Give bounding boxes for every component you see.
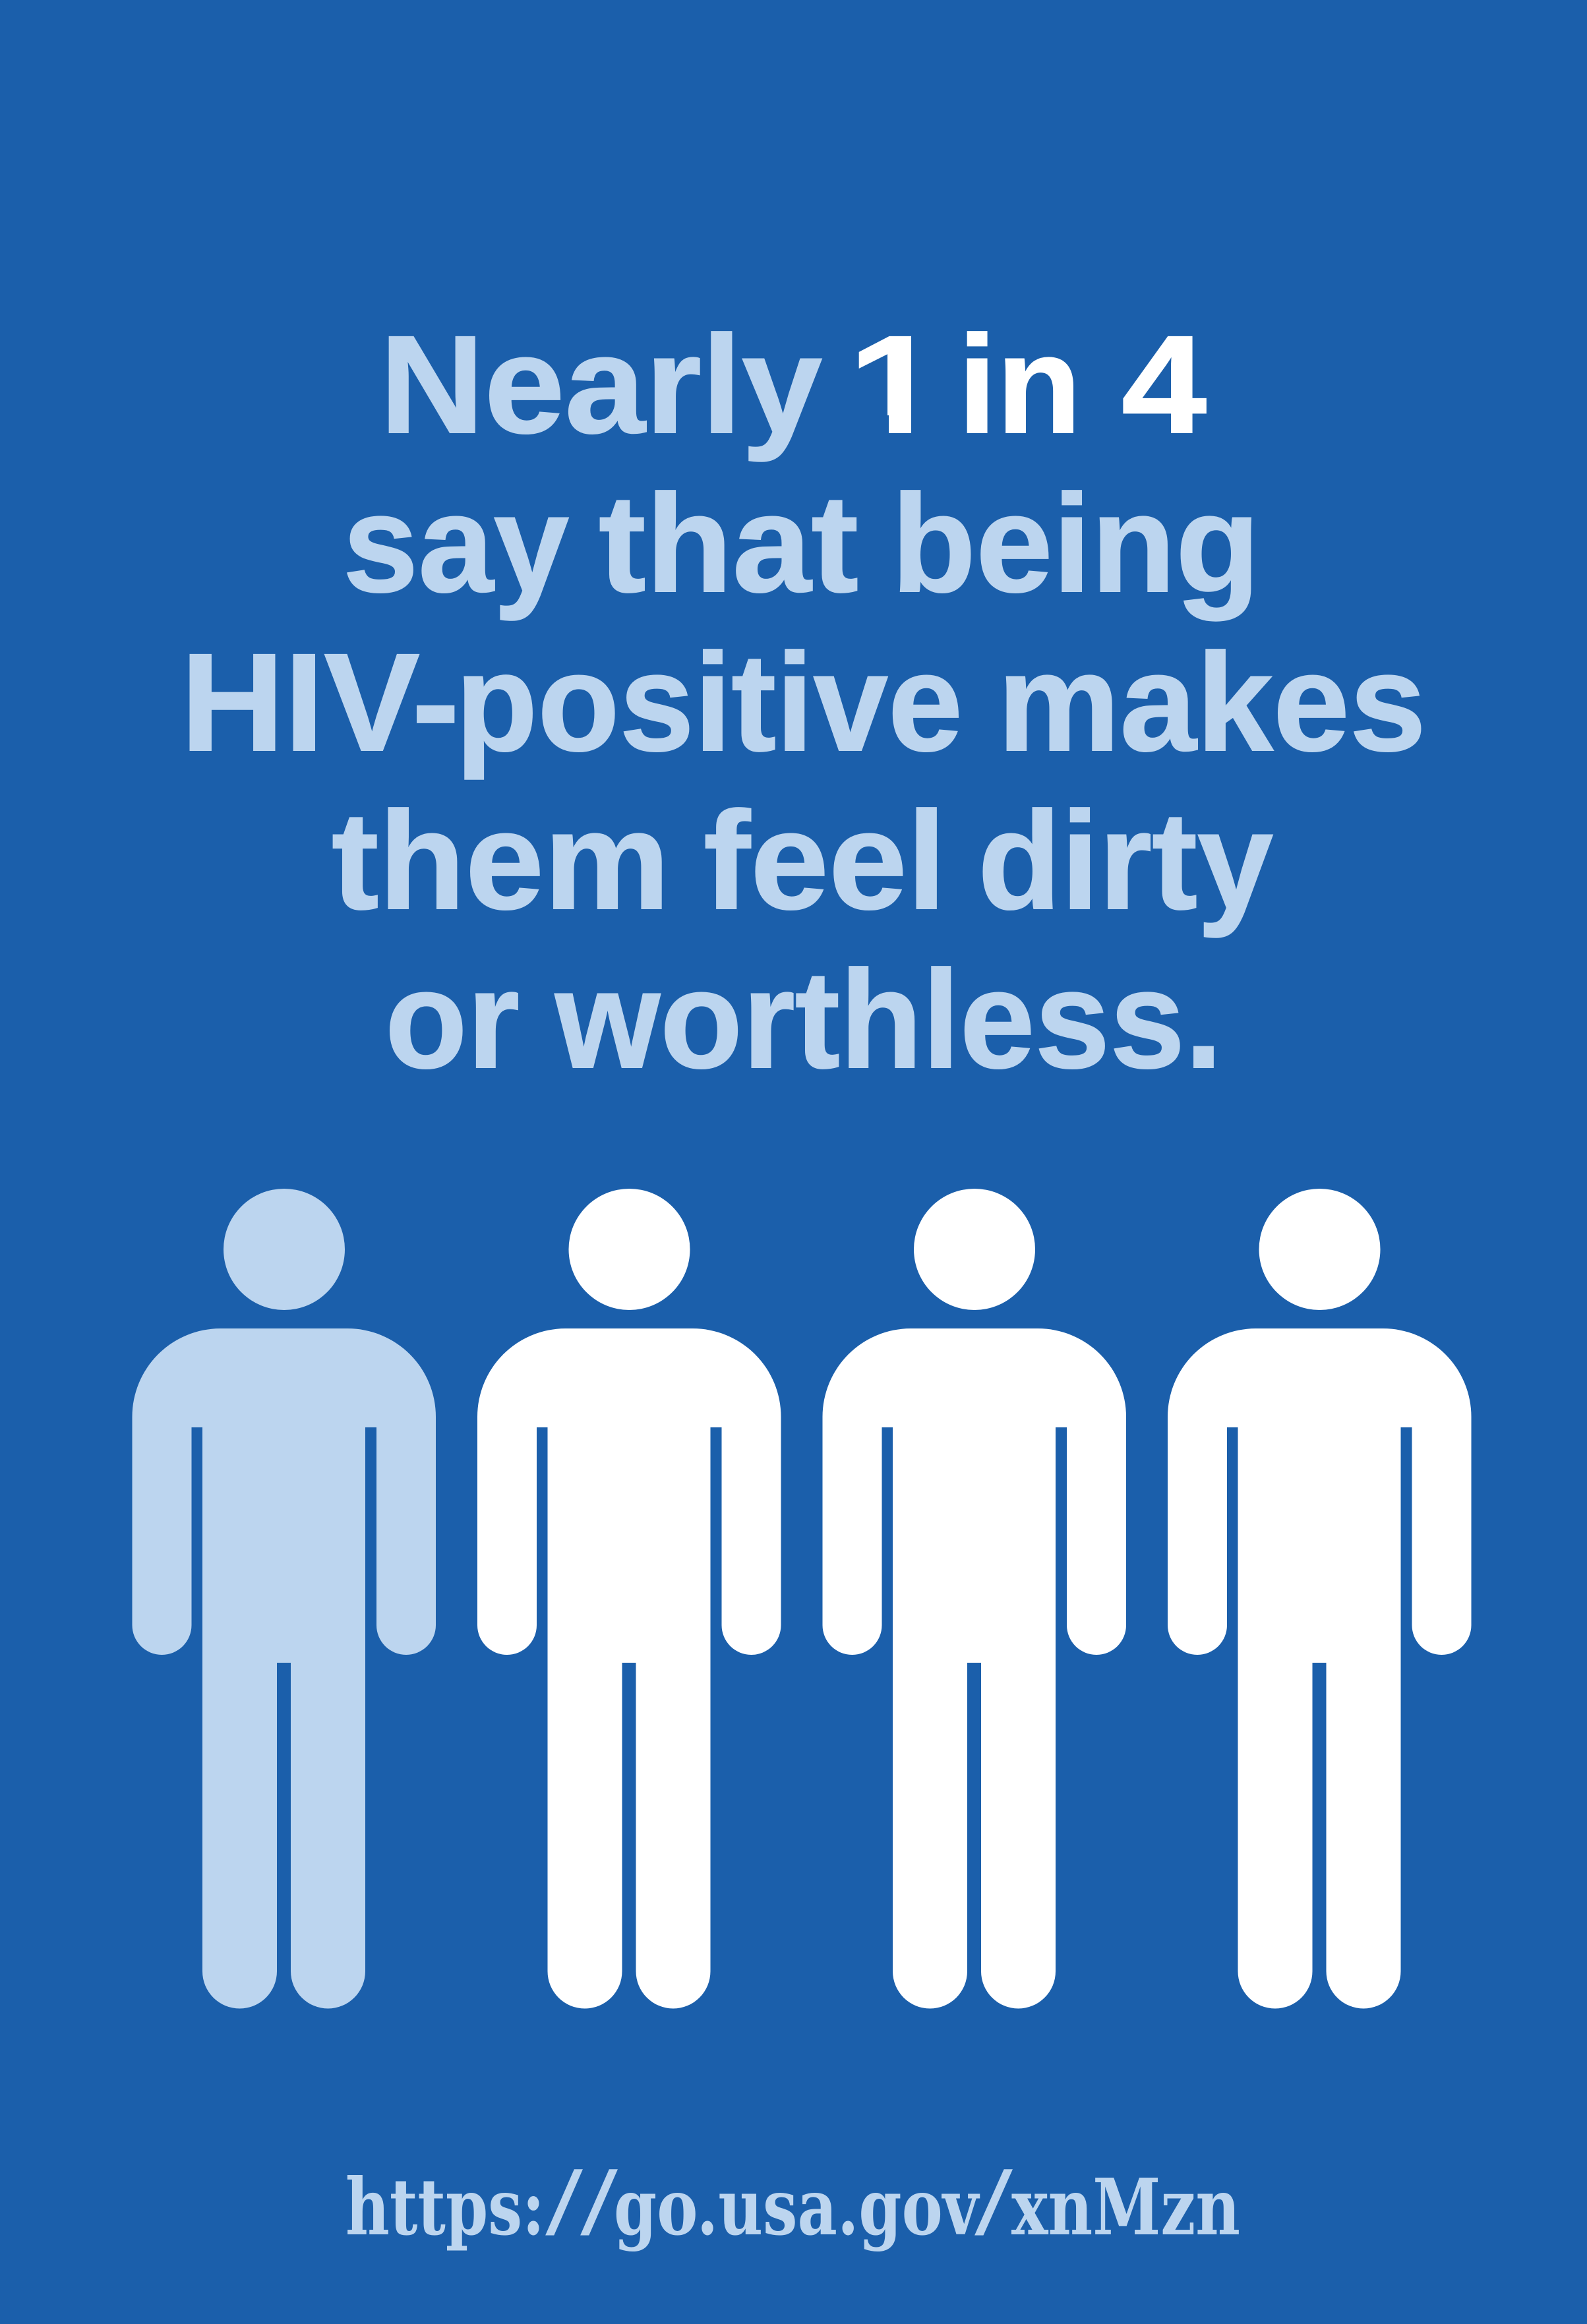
headline line 3: makes	[998, 624, 1426, 780]
headline line 4: them	[332, 783, 670, 938]
headline line 2: that	[599, 465, 858, 621]
headline line 2: say	[343, 465, 569, 621]
icon: person 2	[477, 1189, 781, 2008]
source url: https:	[345, 2161, 545, 2253]
headline line 5: or	[385, 941, 520, 1097]
infographic canvas	[132, 331, 1472, 2251]
icon: person 4	[1168, 1189, 1472, 2008]
source url: //	[545, 2147, 618, 2256]
headline line 4	[332, 783, 1273, 938]
source url: xnMzn	[1011, 2161, 1240, 2253]
headline line 3: positive	[456, 624, 963, 780]
headline line 3: HIV-	[181, 624, 460, 780]
icon: person highlighted	[132, 1189, 436, 2008]
headline line 4: dirty	[978, 783, 1273, 938]
headline line 5: worthless.	[554, 941, 1222, 1097]
headline line 3	[181, 624, 1426, 780]
source url	[345, 2147, 1240, 2256]
headline line 1: in	[958, 307, 1081, 462]
icon: person 3	[823, 1189, 1126, 2008]
headline line 1: 4	[1122, 307, 1207, 462]
headline line 1	[389, 331, 1207, 462]
headline line 2: being	[891, 465, 1260, 621]
headline line 2	[343, 465, 1260, 621]
source url: go.usa.gov	[614, 2161, 980, 2253]
headline line 4: feel	[704, 783, 946, 938]
row of four people icons	[132, 1189, 1472, 2008]
headline line 1: Nearly	[380, 307, 822, 462]
headline	[181, 307, 1426, 1097]
source url: /	[974, 2147, 1013, 2256]
headline line 1: 1	[848, 307, 944, 462]
